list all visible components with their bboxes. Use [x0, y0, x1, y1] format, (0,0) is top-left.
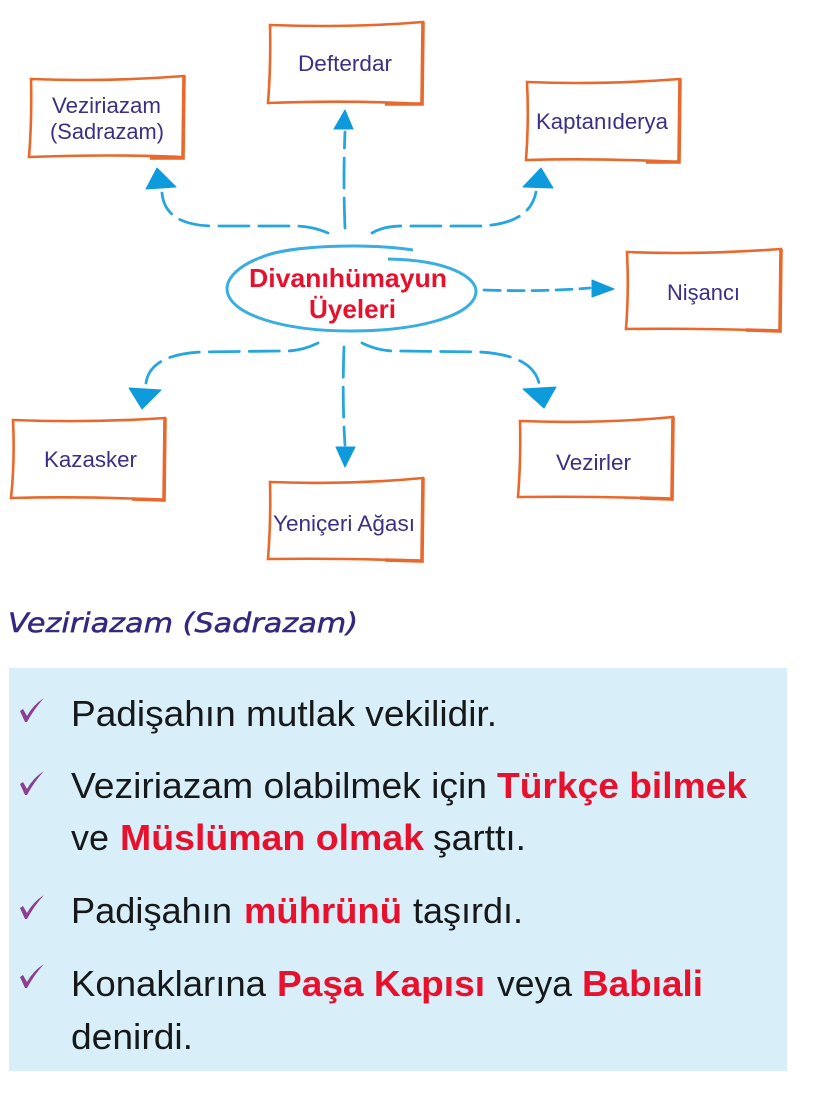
box: Defterdar: [268, 22, 423, 104]
arrow: to Kazasker: [129, 343, 318, 409]
arrow: to Veziriazam: [146, 168, 328, 233]
box: Veziriazam (Sadrazam): (Sadrazam): [50, 119, 164, 144]
box: Defterdar: Defterdar: [298, 51, 392, 76]
item: Padişahın mutlak vekilidir: Padişahın mutlak vekilidir.: [71, 693, 497, 734]
arrow: to Nişancı: [484, 280, 614, 297]
item: Paşa Kapısı veya Babıali denirdi: [20, 963, 703, 1057]
item: mührünü taşırdı: mührünü: [244, 890, 402, 931]
item: Türkçe bilmek ve Müslüman olmak: [20, 765, 748, 858]
item: Türkçe bilmek ve Müslüman olmak: Müslüman olmak: [120, 817, 425, 858]
box: Veziriazam (Sadrazam): [29, 76, 184, 158]
box: Kazasker: [11, 418, 165, 500]
item: Paşa Kapısı veya Babıali denirdi: Paşa Kapısı: [277, 963, 485, 1004]
box: Kaptanıderya: Kaptanıderya: [536, 109, 669, 134]
box: Veziriazam (Sadrazam): Veziriazam: [52, 93, 161, 118]
item: Paşa Kapısı veya Babıali denirdi: denirdi.: [71, 1016, 193, 1057]
box: Kazasker: Kazasker: [44, 447, 137, 472]
box: Yeniçeri Ağası: Yeniçeri Ağası: [273, 511, 415, 536]
arrow: to Vezirler: [362, 343, 556, 408]
item: Paşa Kapısı veya Babıali denirdi: veya: [497, 963, 573, 1004]
item: Türkçe bilmek ve Müslüman olmak: ve: [71, 817, 109, 858]
arrow: to Defterdar: [334, 110, 353, 228]
panel: Veziriazam facts: [9, 668, 787, 1071]
item: Paşa Kapısı veya Babıali denirdi: Babıali: [582, 963, 703, 1004]
central ellipse: Divanıhümayun Üyeleri: Divanıhümayun: [249, 263, 447, 293]
item: Türkçe bilmek ve Müslüman olmak: Veziriazam olabilmek için: [71, 765, 487, 806]
arrow: to Kaptanıderya: [372, 168, 553, 233]
item: mührünü taşırdı: taşırdı.: [413, 890, 523, 931]
box: Vezirler: [518, 417, 673, 499]
item: Paşa Kapısı veya Babıali denirdi: Konaklarına: [71, 963, 267, 1004]
box: Kaptanıderya: [526, 79, 680, 162]
arrow: to Yeniçeri Ağası: [336, 347, 355, 467]
item: mührünü taşırdı: [20, 890, 523, 931]
box: Nişancı: Nişancı: [667, 280, 740, 305]
box: Yeniçeri Ağası: [268, 478, 423, 561]
central ellipse: Divanıhümayun Üyeleri: Üyeleri: [309, 294, 396, 324]
item: Türkçe bilmek ve Müslüman olmak: şarttı.: [433, 817, 526, 858]
box: Nişancı: [626, 249, 781, 331]
item: mührünü taşırdı: Padişahın: [71, 890, 232, 931]
section heading: Veziriazam (Sadrazam): Veziriazam (Sadrazam): [8, 608, 358, 639]
central ellipse: Divanıhümayun Üyeleri: [227, 246, 476, 331]
box: Vezirler: Vezirler: [556, 450, 631, 475]
item: Türkçe bilmek ve Müslüman olmak: Türkçe bilmek: [497, 765, 748, 806]
